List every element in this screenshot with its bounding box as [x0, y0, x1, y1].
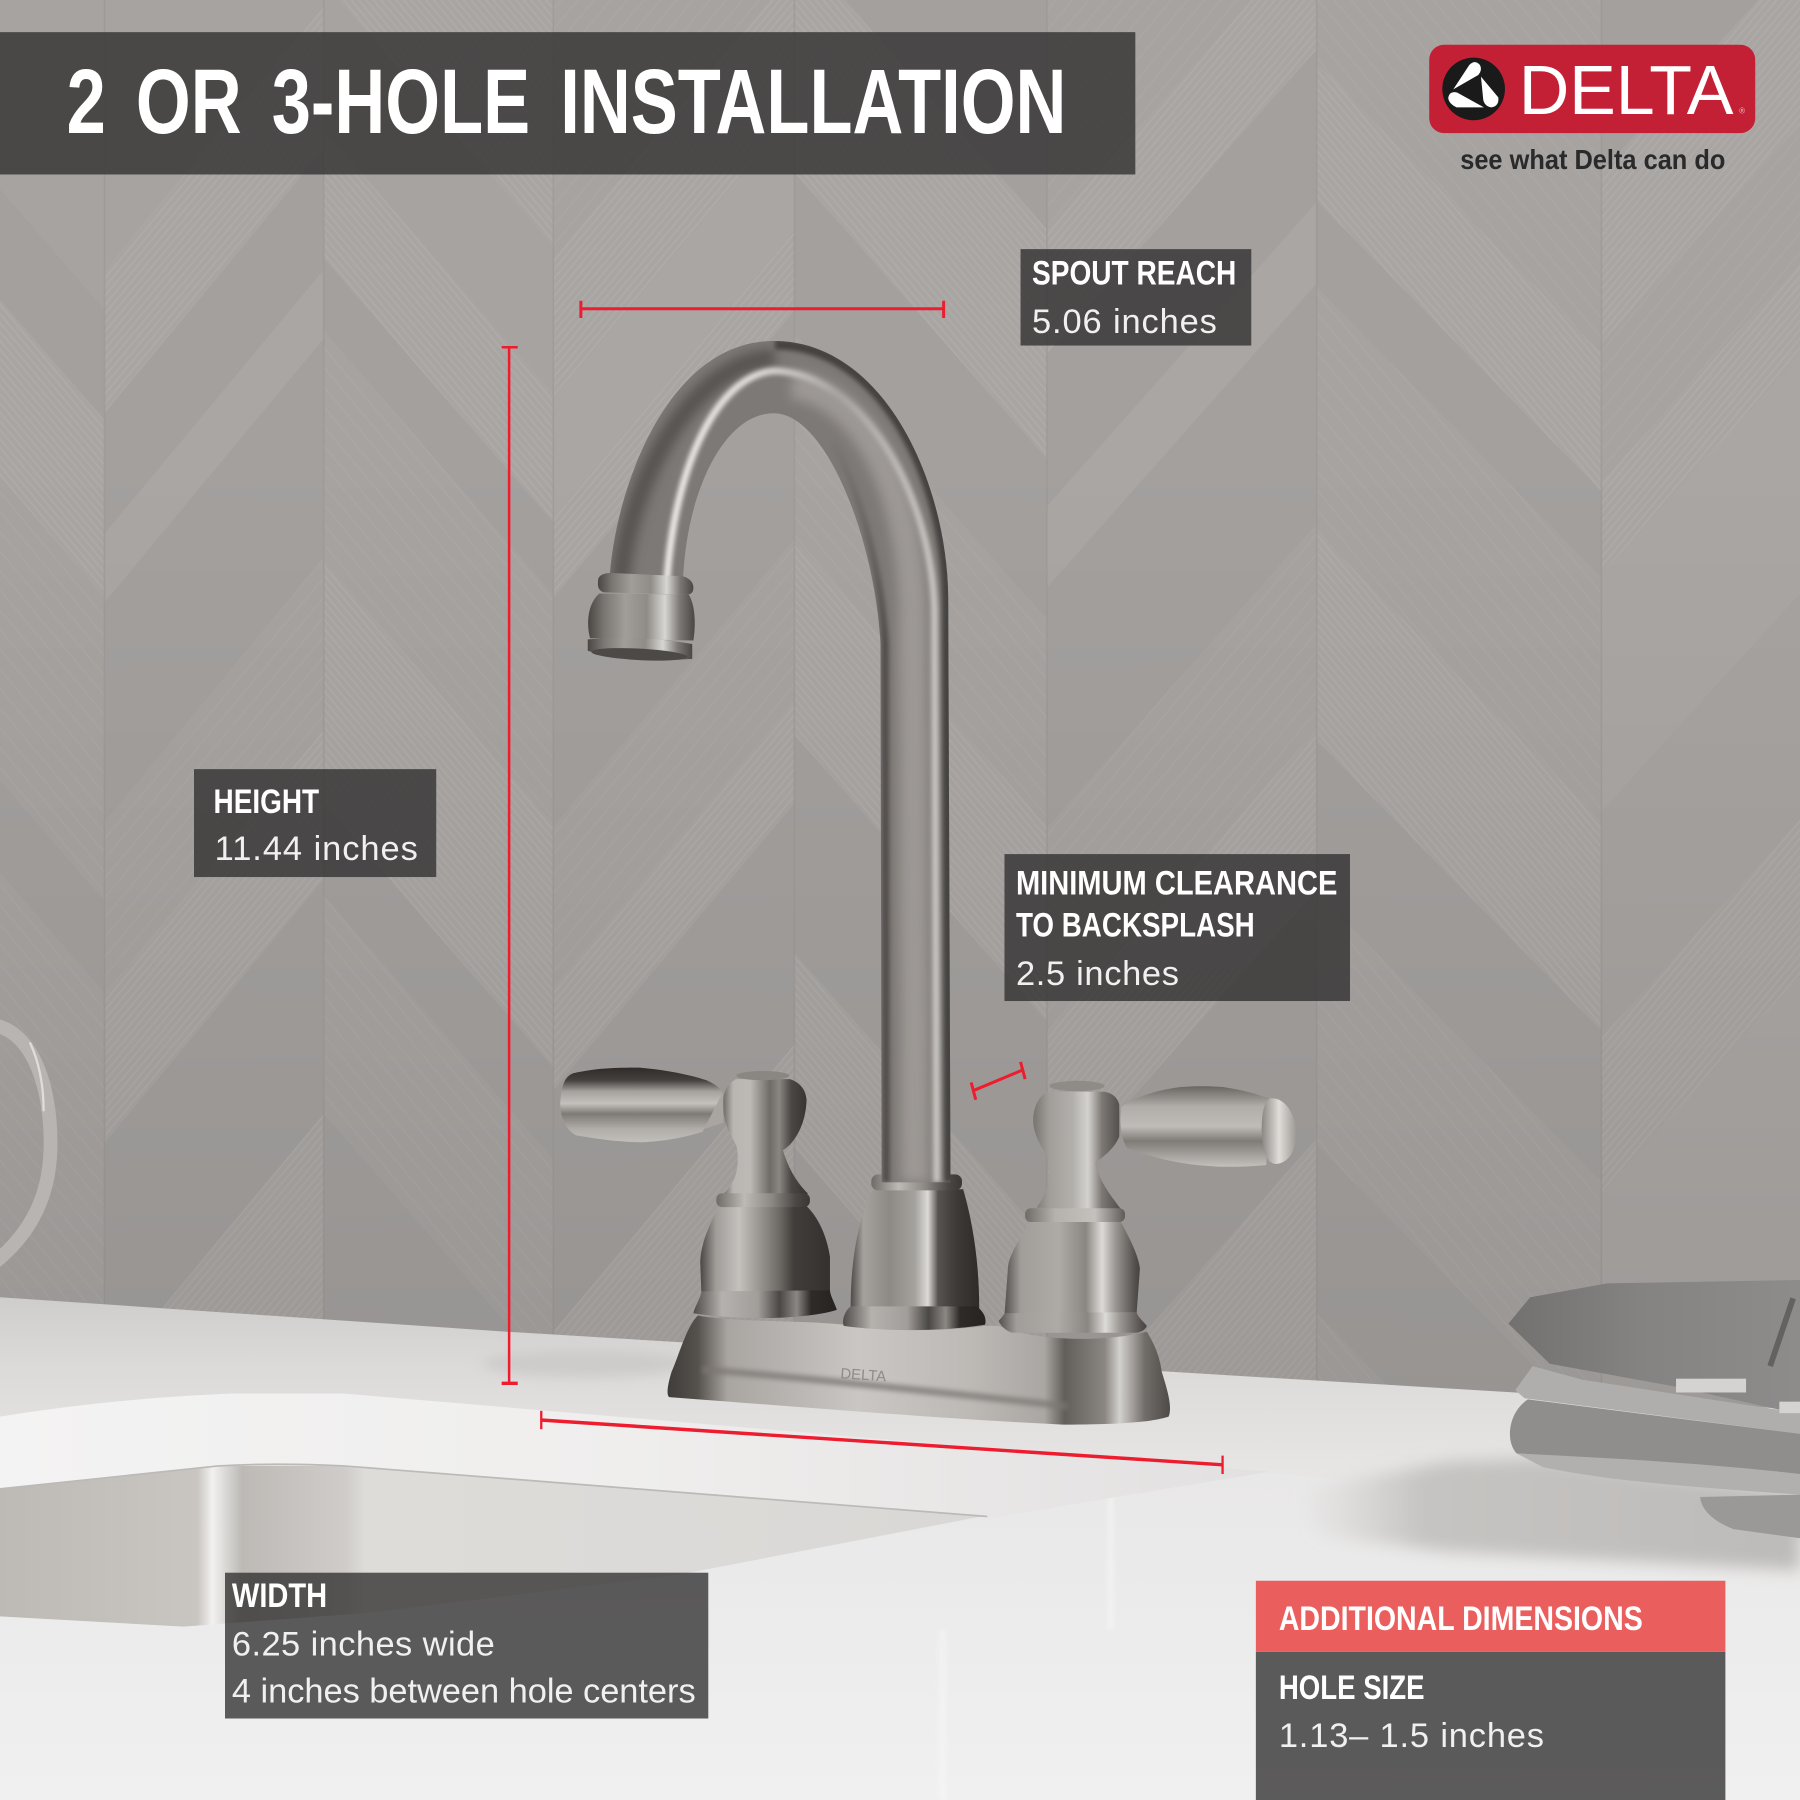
- tagline: see what Delta can do: [1460, 144, 1725, 175]
- Delta logo: DELTA: [1519, 51, 1734, 129]
- callout: height: [194, 769, 436, 877]
- panel: additional dimensions: HOLE SIZE: [1279, 1669, 1425, 1707]
- Delta logo: ®: [1739, 107, 1745, 116]
- title text: 2 OR 3-HOLE INSTALLATION: [67, 51, 1066, 153]
- callout: width: 6.25 inches wide: [232, 1625, 495, 1663]
- callout: spout reach: [1021, 249, 1251, 346]
- callout: spout reach: SPOUT REACH: [1032, 255, 1236, 293]
- faucet: gooseneck spout: [597, 333, 964, 1188]
- sink basin: [0, 1394, 1268, 1627]
- Delta logo: [1429, 45, 1755, 133]
- panel: additional dimensions: 1.13– 1.5 inches: [1279, 1717, 1544, 1755]
- dimension line: height: [502, 347, 518, 1383]
- callout: minimum clearance to backsplash: [1004, 854, 1350, 1001]
- faucet: right handle: [999, 1081, 1297, 1333]
- panel: additional dimensions: [1256, 1581, 1725, 1800]
- callout: spout reach: 5.06 inches: [1032, 303, 1217, 341]
- countertop: [0, 1297, 1800, 1800]
- callout: height: HEIGHT: [214, 783, 319, 821]
- faucet: aerator: [588, 573, 695, 663]
- dimension line: width: [541, 1411, 1223, 1474]
- faucet: [560, 333, 1297, 1425]
- title banner: [0, 32, 1135, 174]
- faucet: center riser bell: [843, 1174, 986, 1330]
- plates and cloth at right: [1508, 1280, 1800, 1538]
- faucet: deck plate: [668, 1316, 1170, 1425]
- callout: minimum clearance to backsplash: MINIMUM CLEARANCE: [1016, 864, 1337, 902]
- callout: width: WIDTH: [232, 1577, 327, 1615]
- callout: minimum clearance to backsplash: 2.5 inches: [1016, 955, 1179, 993]
- glass handle at left edge: [0, 1025, 51, 1263]
- callout: width: 4 inches between hole centers: [232, 1672, 696, 1710]
- callout: minimum clearance to backsplash: TO BACKSPLASH: [1016, 907, 1255, 945]
- dimension line: backsplash clearance: [971, 1062, 1025, 1100]
- faucet: deck plate: DELTA: [840, 1365, 887, 1385]
- callout: width: [225, 1573, 708, 1718]
- panel: additional dimensions: ADDITIONAL DIMENSIONS: [1279, 1600, 1643, 1638]
- callout: height: 11.44 inches: [215, 830, 418, 868]
- dimension line: spout reach: [581, 301, 944, 318]
- faucet: left handle: [560, 1068, 837, 1318]
